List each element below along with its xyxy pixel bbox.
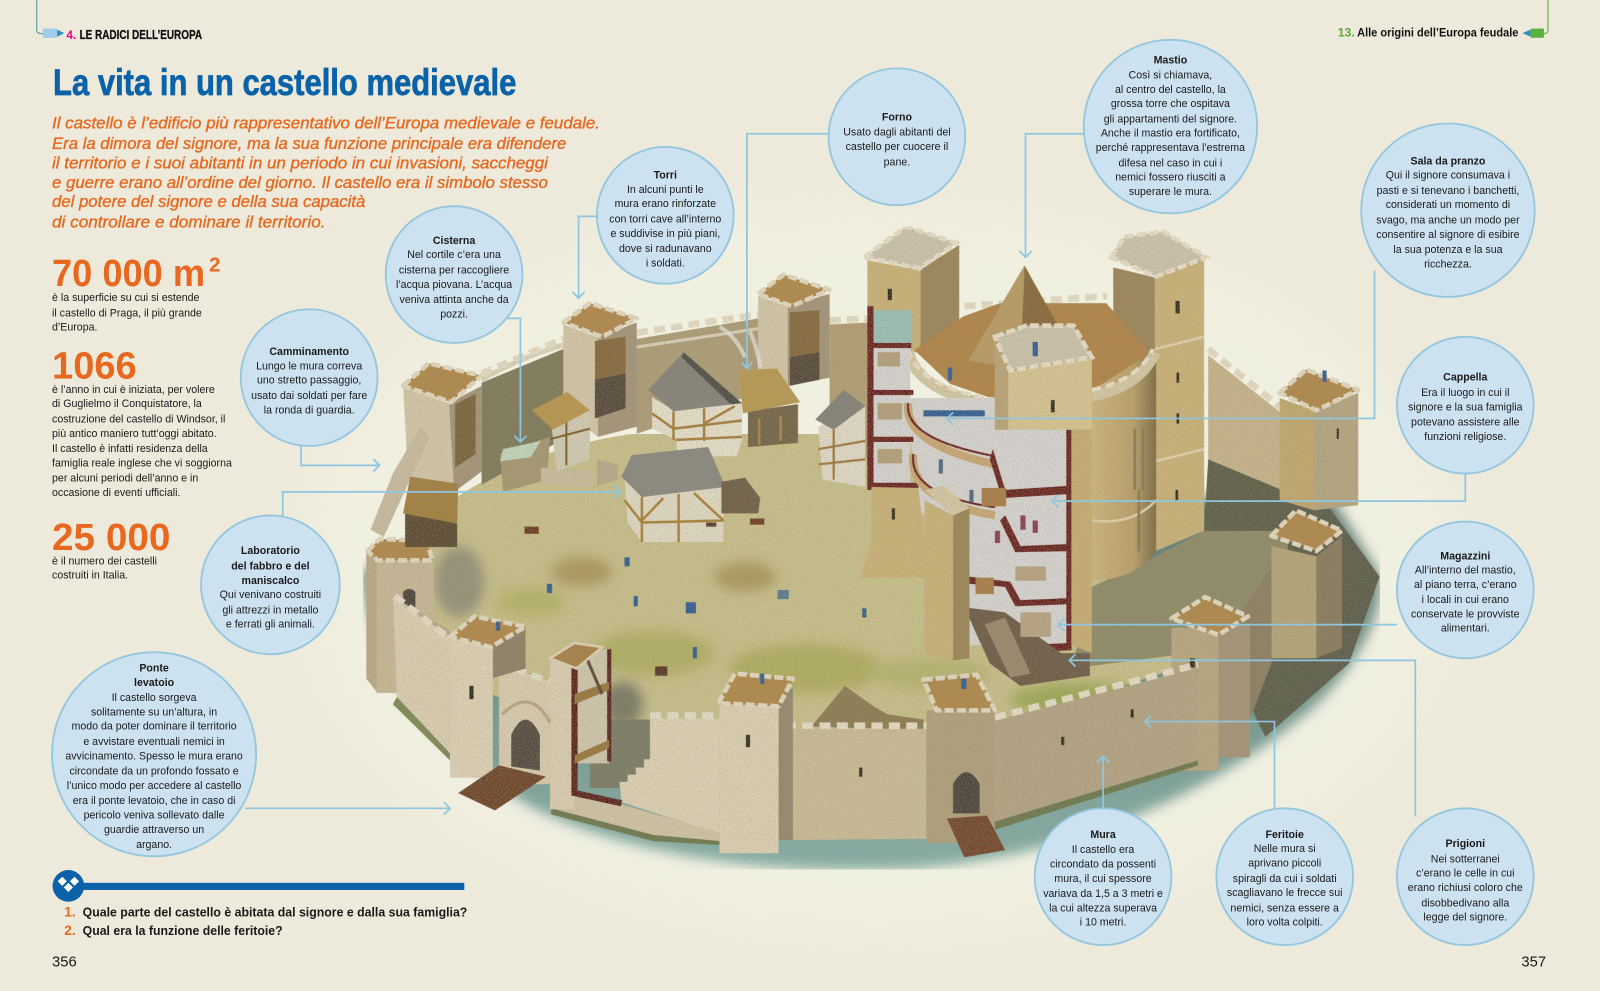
bubble: Sala da pranzo	[1361, 123, 1535, 297]
callout arrow: Laboratorio	[283, 486, 620, 521]
bubble: Torri: e suddivise in più piani,	[610, 228, 720, 240]
bubble: Ponte levatoio: Il castello sorgeva	[112, 692, 197, 704]
bubble: Cisterna: pozzi.	[440, 308, 468, 320]
callout arrow: Torri	[572, 216, 598, 298]
stat: 70 000 m2: 2	[209, 254, 221, 276]
intro text: il territorio e i suoi abitanti in un periodo in cui invasioni, saccheggi	[52, 153, 549, 172]
tower D great left tower	[864, 227, 959, 352]
callout arrow: Mastio	[1019, 134, 1084, 257]
grey house right	[815, 390, 865, 487]
bubble: Torri: i soldati.	[646, 257, 685, 269]
stat: 1066: 1066	[52, 345, 137, 387]
left stairs	[370, 427, 430, 537]
bubble: Prigioni: disobbedivano alla	[1421, 897, 1509, 909]
intro text: Il castello è l’edificio più rappresentativo dell’Europa medievale e feudale.	[52, 114, 600, 133]
bubble: Mura: Mura	[1090, 829, 1116, 841]
bubble: Ponte levatoio: Ponte	[139, 663, 169, 675]
stat: 70 000 m2: 70 000 m	[52, 252, 205, 294]
bubble: Forno: castello per cuocere il	[846, 141, 948, 153]
stat: 25 000: è il numero dei castelli	[52, 555, 157, 567]
bubble: Mastio: al centro del castello, la	[1115, 84, 1226, 96]
stat: 25 000	[52, 516, 170, 582]
bubble: Mastio: superare le mura.	[1129, 186, 1212, 198]
bubble: Prigioni: legge del signore.	[1423, 912, 1507, 924]
header right	[1338, 0, 1548, 40]
castle illustration	[363, 227, 1380, 869]
bubble: Laboratorio: e ferrati gli animali.	[226, 619, 315, 631]
timber house	[648, 352, 742, 456]
bubble: Ponte levatoio: argano.	[136, 839, 172, 851]
bubble: Cappella: signore e la sua famiglia	[1408, 401, 1523, 413]
bubble: Sala da pranzo: ricchezza.	[1424, 258, 1472, 270]
callout arrow: Magazzini	[1058, 618, 1397, 631]
bubble: Mura: variava da 1,5 a 3 metri e	[1043, 888, 1163, 900]
bubble: Magazzini: alimentari.	[1441, 623, 1490, 635]
bubble: Cisterna: veniva attinta anche da	[400, 294, 509, 306]
bubble: Cappella	[1397, 337, 1534, 474]
bubble: Camminamento: usato dai soldati per fare	[251, 390, 367, 402]
stat: 1066: è l’anno in cui è iniziata, per volere	[52, 384, 215, 396]
bubble: Sala da pranzo: pasti e si tenevano i banchetti,	[1377, 185, 1519, 197]
bubble: Ponte levatoio: e avvistare eventuali nemici in	[83, 736, 225, 748]
bubble: Mastio: Così si chiamava,	[1129, 70, 1212, 82]
bubble: Feritoie: scagliavano le frecce sui	[1227, 887, 1342, 899]
courtyard patches	[435, 547, 1153, 727]
bubble: Ponte levatoio: levatoio	[134, 677, 175, 689]
callout arrow: Forno	[742, 134, 829, 368]
left thatched lean-to	[403, 477, 458, 547]
header right: 13.	[1338, 26, 1355, 40]
bubble: Sala da pranzo: consentire al signore di esibire	[1376, 229, 1520, 241]
bubble: Prigioni: Prigioni	[1446, 838, 1485, 850]
bubble: Feritoie	[1216, 808, 1353, 945]
bubble: Torri	[597, 147, 734, 284]
bubble: Forno	[829, 68, 965, 205]
right wall and tower H	[1204, 349, 1358, 531]
keep cutaway interior	[867, 306, 1092, 686]
bubble: Mura: la cui altezza superava	[1049, 902, 1157, 914]
stat: 1066: di Guglielmo il Conquistatore, la	[52, 398, 202, 410]
rear wall segments	[482, 314, 867, 485]
small figures	[496, 342, 1327, 689]
bubble: Mastio: nemici fossero riusciti a	[1115, 172, 1226, 184]
header left: LE RADICI DELL’EUROPA	[80, 27, 202, 42]
tower C	[758, 275, 830, 386]
bubble: Laboratorio: Laboratorio	[241, 545, 300, 557]
bubble: Laboratorio: Qui venivano costruiti	[220, 589, 321, 601]
stat: 1066: famiglia reale inglese che vi soggiorna	[52, 457, 232, 469]
stat: 1066: costruzione del castello di Windsor, il	[52, 414, 225, 426]
callout arrow: Prigioni	[1069, 654, 1415, 816]
drawbridge	[458, 765, 546, 810]
bubble: Mastio: perché rappresentava l’estrema	[1096, 142, 1245, 154]
bubble: Ponte levatoio: pericolo veniva sollevato dalle	[84, 810, 225, 822]
bubble: Torri: mura erano rinforzate	[615, 198, 716, 210]
questions rule with icon	[53, 870, 464, 902]
bubble: Cappella: Cappella	[1443, 372, 1488, 384]
header left: 4.	[66, 29, 76, 42]
left wall and walkway	[392, 596, 450, 760]
wooden keep roof	[908, 265, 1155, 406]
thatched forge	[719, 327, 800, 447]
bubble: Camminamento: Lungo le mura correva	[256, 360, 362, 372]
page number 357: 357	[1521, 955, 1546, 971]
stat: 70 000 m2: è la superficie su cui si estende	[52, 292, 200, 304]
bubble: Torri: con torri cave all’interno	[609, 213, 721, 225]
questions	[64, 904, 467, 938]
stat: 70 000 m2: il castello di Praga, il più grande	[52, 307, 202, 319]
stat: 70 000 m2	[52, 252, 221, 334]
bubble: Cisterna: cisterna per raccogliere	[399, 265, 509, 277]
bubble: Prigioni	[1397, 808, 1534, 945]
bubble: Sala da pranzo: Sala da pranzo	[1411, 155, 1486, 167]
stat: 1066	[52, 345, 232, 499]
bubble: Torri: Torri	[654, 170, 677, 182]
bubble: Ponte levatoio: circondate da un profondo fossato e	[69, 766, 239, 778]
bubble: Ponte levatoio: solitamente su un’altura, in	[91, 706, 217, 718]
bubble: Magazzini: i locali in cui erano	[1422, 594, 1509, 606]
bubble: Sala da pranzo: svago, ma anche un modo per	[1376, 215, 1520, 227]
stat: 1066: Il castello è infatti residenza della	[52, 443, 208, 455]
hill beside keep	[1071, 531, 1288, 668]
moat water	[363, 490, 1379, 869]
bubble: Mura	[1035, 808, 1171, 945]
bubble: Cisterna: Nel cortile c’era una	[407, 249, 501, 261]
callout arrow: Mura	[1097, 756, 1109, 811]
bubble: Mastio: gli appartamenti del signore.	[1104, 113, 1237, 125]
tower K with gate	[923, 675, 1005, 857]
bubble: Mastio: grossa torre che ospitava	[1111, 98, 1230, 110]
stat: 70 000 m2: d’Europa.	[52, 322, 97, 334]
bubble: Mastio: Mastio	[1154, 54, 1188, 66]
gatehouse with arch	[499, 663, 550, 786]
questions: Quale parte del castello è abitata dal signore e dalla sua famiglia?	[83, 904, 467, 919]
right tower I and wall	[1224, 510, 1342, 716]
bubble: Forno: pane.	[884, 156, 910, 168]
bubble: Camminamento	[241, 309, 378, 446]
cistern	[500, 437, 617, 492]
bubble: Cisterna: Cisterna	[433, 235, 475, 247]
bubble: Mastio: difesa nel caso in cui i	[1119, 157, 1222, 169]
front mound	[811, 686, 923, 730]
callout arrow: Camminamento	[301, 443, 380, 472]
bubble: Prigioni: Nei sotterranei	[1431, 853, 1500, 865]
cutaway gate tower	[550, 643, 621, 809]
questions: Qual era la funzione delle feritoie?	[83, 923, 283, 938]
thatched house near cistern	[532, 392, 590, 472]
bubble: Prigioni: c’erano le celle in cui	[1416, 868, 1515, 880]
bubble: Ponte levatoio: guardie attraverso un	[104, 824, 204, 836]
bubble: Prigioni: erano richiusi coloro che	[1408, 882, 1523, 894]
callout arrow: Feritoie	[1145, 715, 1274, 811]
callout arrow: Cisterna	[507, 318, 527, 442]
bubble: Mura: circondato da possenti	[1050, 859, 1156, 871]
bubble: Mura: Il castello era	[1072, 844, 1134, 856]
tower A	[403, 363, 482, 492]
intro text: e guerre erano all’ordine del giorno. Il castello era il simbolo stesso	[52, 173, 548, 192]
bubble: Mura: i 10 metri.	[1080, 917, 1126, 929]
tower G lower front keep tower	[860, 486, 969, 660]
tower L	[718, 674, 793, 853]
tower B	[563, 303, 637, 437]
bubble: Cappella: Era il luogo in cui il	[1421, 387, 1510, 399]
bubble: Magazzini: All’interno del mastio,	[1415, 565, 1516, 577]
bubble: Magazzini	[1397, 522, 1534, 658]
bubble: Mura: mura, il cui spessore	[1054, 873, 1152, 885]
callout arrow: Sala da pranzo	[947, 270, 1374, 425]
tower M corner tower	[366, 539, 434, 693]
bubble: Laboratorio: del fabbro e del	[231, 560, 310, 572]
bubble: Feritoie: loro volta colpiti.	[1247, 917, 1323, 929]
bubble: Ponte levatoio: era il ponte levatoio, che in caso di	[73, 795, 235, 807]
bubble: Ponte levatoio: avvicinamento. Spesso le mura erano	[65, 750, 243, 762]
bubble: Camminamento: la ronda di guardia.	[264, 404, 355, 416]
stat: 1066: più antico maniero tutt’oggi abitato.	[52, 428, 217, 440]
bubble: Ponte levatoio: modo da poter dominare il territorio	[72, 721, 237, 733]
bubble: Forno: Forno	[882, 111, 912, 123]
bubble: Feritoie: nemici, senza essere a	[1230, 902, 1339, 914]
bubble: Sala da pranzo: considerati un momento di	[1386, 199, 1510, 211]
bubble: Torri: dove si radunavano	[619, 243, 712, 255]
bubble: Feritoie: Nelle mura si	[1254, 843, 1316, 855]
bubble: Cisterna	[386, 206, 522, 343]
bubble: Laboratorio: maniscalco	[242, 575, 300, 587]
tower E great right tower	[1111, 232, 1206, 551]
stat: 25 000: costruiti in Italia.	[52, 570, 128, 582]
stat: 25 000: 25 000	[52, 516, 170, 558]
title: La vita in un castello medievale	[53, 62, 516, 103]
bubble: Ponte levatoio	[52, 652, 256, 856]
bubble: Feritoie: Feritoie	[1266, 829, 1304, 841]
bubble: Feritoie: aprivano piccoli	[1248, 857, 1321, 869]
bubble: Laboratorio: gli attrezzi in metallo	[222, 604, 319, 616]
page number 356: 356	[52, 955, 77, 971]
bubble: Magazzini: Magazzini	[1440, 550, 1490, 562]
bubble: Torri: In alcuni punti le	[627, 184, 704, 196]
stat: 1066: occasione di eventi ufficiali.	[52, 487, 180, 499]
intro text: del potere del signore e della sua capacità	[52, 192, 365, 211]
bubble: Ponte levatoio: l’unico modo per accedere al castello	[67, 780, 241, 792]
bubble: Cappella: potevano assistere alle	[1411, 417, 1520, 429]
intro text: Era la dimora del signore, ma la sua funzione principale era difendere	[52, 134, 566, 153]
tower F front tower of keep	[995, 326, 1092, 430]
callout arrow: Ponte levatoio	[245, 802, 450, 814]
bubble: Magazzini: al piano terra, c’erano	[1414, 579, 1517, 591]
gate tower	[450, 616, 526, 778]
callout arrow: Cappella	[1052, 474, 1465, 507]
bubble: Camminamento: uno stretto passaggio,	[257, 375, 361, 387]
bubble: Forno: Usato dagli abitanti del	[843, 127, 951, 139]
bubble: Feritoie: spiragli da cui i soldati	[1233, 873, 1337, 885]
front wall centre	[785, 726, 927, 840]
bubble: Cappella: funzioni religiose.	[1424, 431, 1506, 443]
tower J	[1171, 597, 1250, 771]
rear right dark slope	[1204, 490, 1380, 737]
stat: 1066: per alcuni periodi dell’anno e in	[52, 473, 198, 485]
large front house	[621, 447, 760, 542]
light halo behind castle	[306, 214, 1449, 929]
questions: 1.	[64, 904, 76, 919]
courtyard ground	[392, 434, 1224, 739]
bubble: Sala da pranzo: la sua potenza e la sua	[1393, 244, 1503, 256]
bubble: Mastio: Anche il mastio era fortificato,	[1101, 128, 1240, 140]
bubble: Cisterna: l’acqua piovana. L’acqua	[396, 279, 512, 291]
header right: Alle origini dell’Europa feudale	[1357, 26, 1519, 40]
intro text: di controllare e dominare il territorio.	[52, 213, 326, 232]
front wall right	[995, 664, 1198, 830]
stair wall	[550, 715, 719, 845]
header left	[37, 0, 202, 42]
bubble: Camminamento: Camminamento	[269, 346, 349, 358]
questions: 2.	[64, 923, 76, 938]
bubble: Sala da pranzo: Qui il signore consumava i	[1386, 170, 1510, 182]
bubble: Laboratorio	[201, 515, 340, 654]
bubble: Magazzini: conservate le provviste	[1411, 608, 1520, 620]
keep cylinder	[1092, 352, 1156, 580]
bubble: Mastio	[1084, 40, 1257, 213]
